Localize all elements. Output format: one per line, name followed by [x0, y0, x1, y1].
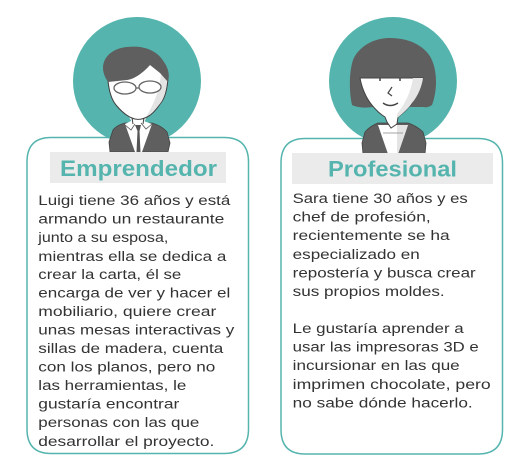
text block: luigi: gustaría encontrar — [38, 397, 180, 413]
text block: luigi: encarga de ver y hacer el — [38, 286, 230, 302]
text block: luigi — [37, 193, 235, 450]
text block: luigi: sillas de madera, cuenta — [38, 341, 223, 357]
circle: emprendedor background — [73, 17, 201, 145]
heading bar: emprendedor: Emprendedor — [60, 156, 217, 181]
text block: sara: Le gustaría aprender a — [293, 321, 464, 337]
text block: luigi: mobiliario, quiere crear — [38, 304, 217, 320]
heading bar: profesional: Profesional — [328, 156, 457, 182]
text block: luigi: unas mesas interactivas y — [38, 322, 235, 338]
text block: sara: especializado en — [293, 247, 420, 263]
circle: profesional background — [329, 17, 457, 145]
heading bar: emprendedor — [50, 152, 226, 183]
text block: luigi: con los planos, pero no — [38, 360, 215, 376]
text block: sara — [293, 191, 491, 411]
text block: sara: chef de profesión, — [293, 210, 431, 226]
card: profesional — [281, 138, 502, 454]
panel: profesional — [281, 17, 502, 454]
text block: sara: usar las impresoras 3D e — [293, 340, 479, 356]
text block: sara: no sabe dónde hacerlo. — [293, 395, 473, 411]
text block: luigi: desarrollar el proyecto. — [38, 434, 214, 450]
heading bar: profesional — [292, 153, 493, 184]
panel: emprendedor — [27, 17, 248, 454]
card: emprendedor — [27, 138, 248, 454]
icon: woman avatar — [350, 38, 436, 154]
text block: sara: repostería y busca crear — [293, 265, 476, 281]
text block: sara: Sara tiene 30 años y es — [293, 191, 468, 207]
text block: luigi: personas con las que — [38, 415, 199, 431]
text block: luigi: Luigi tiene 36 años y está — [38, 193, 230, 209]
text block: luigi: armando un restaurante — [38, 212, 224, 228]
text block: sara: recientemente se ha — [293, 228, 450, 244]
text block: luigi: las herramientas, le — [38, 378, 186, 394]
text block: sara: sus propios moldes. — [293, 284, 445, 300]
text block: sara: imprimen chocolate, pero — [293, 377, 491, 393]
text block: luigi: junto a su esposa, — [37, 230, 168, 246]
text block: luigi: crear la carta, él se — [38, 267, 181, 283]
icon: businessman avatar — [103, 47, 170, 152]
text block: luigi: mientras ella se dedica a — [38, 249, 226, 265]
text block: sara: incursionar en las que — [293, 358, 460, 374]
